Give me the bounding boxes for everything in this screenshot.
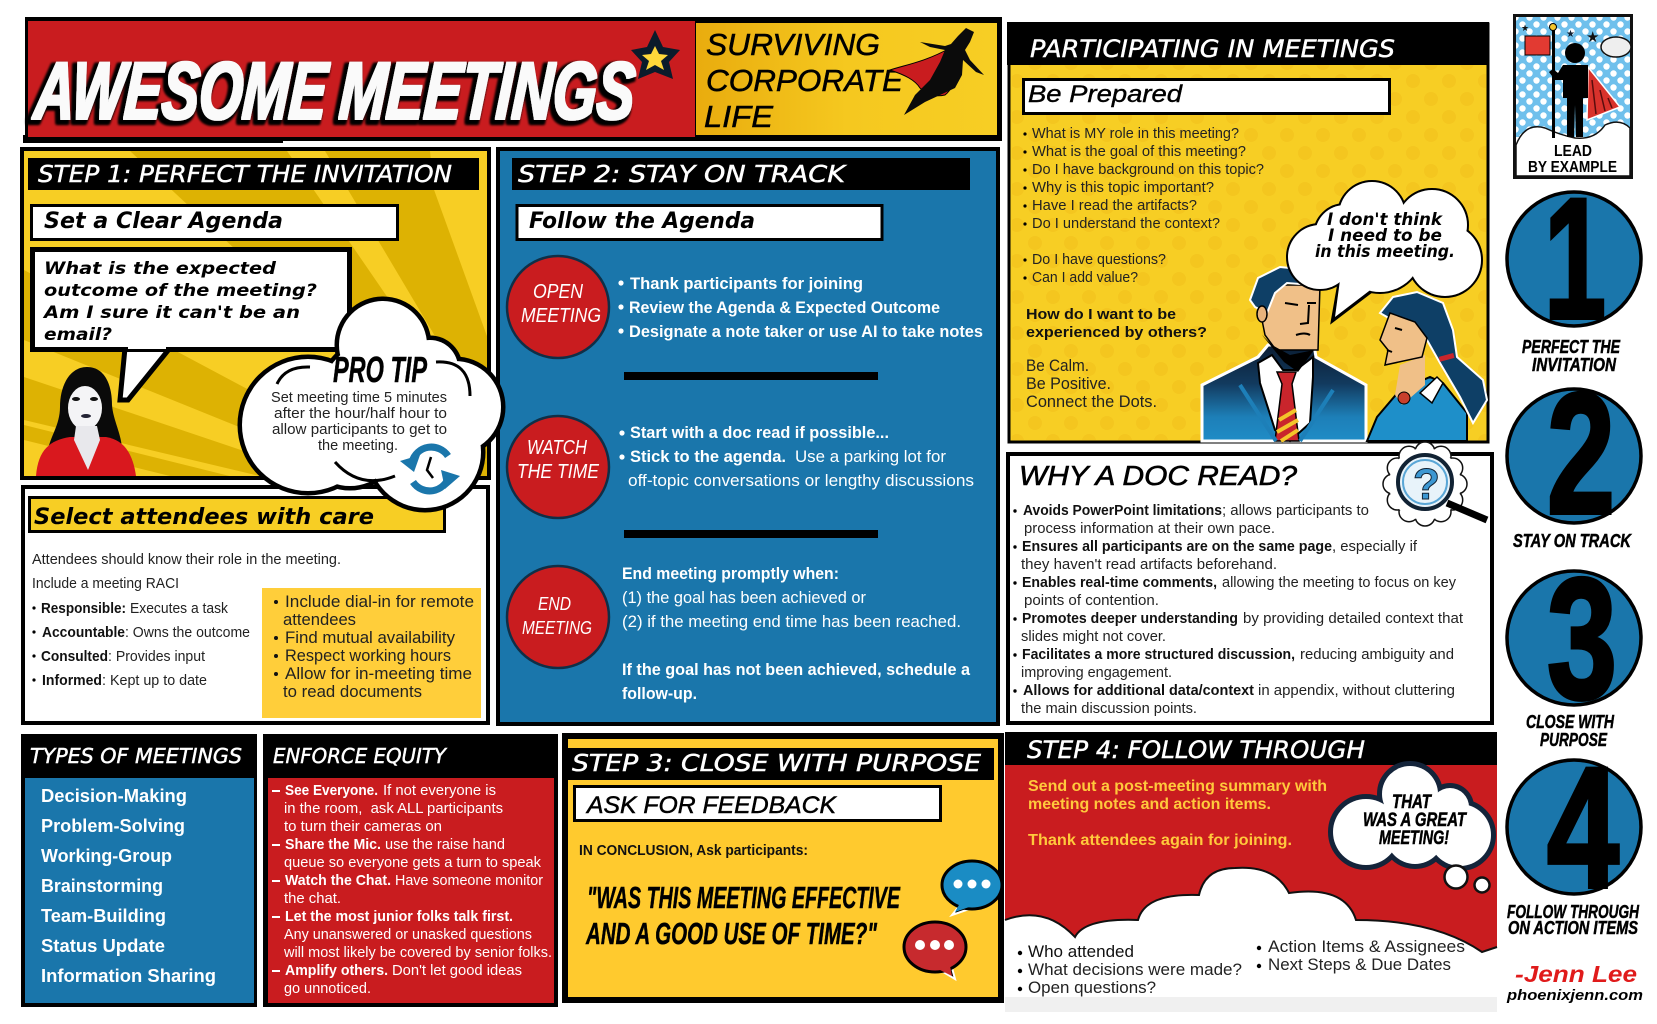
callout: logistics: to read documents — [283, 683, 422, 701]
text: doc read reasons: Promotes deeper understanding — [1022, 610, 1238, 627]
icon: superhero silhouette — [890, 28, 984, 115]
text: RACI: : Kept up to date — [102, 672, 207, 689]
text: doc read reasons: Avoids PowerPoint limitations — [1023, 502, 1222, 519]
text: equity rules: Watch the Chat. — [285, 872, 391, 889]
text: experience: How do I want to be — [1026, 306, 1176, 323]
icon: clock arrows — [400, 447, 460, 491]
card: lead by example: BY EXAMPLE — [1528, 159, 1617, 176]
list: preparation questions: Have I read the artifacts? — [1032, 197, 1197, 214]
text: equity rules: Share the Mic. — [285, 836, 381, 853]
heading: equity: ENFORCE EQUITY — [273, 744, 448, 768]
panel: step 2 — [498, 149, 998, 724]
text: equity rules: If not everyone is — [383, 782, 496, 799]
icon: magnifier question: ? — [1413, 460, 1440, 509]
white cloud with lists: Action Items & Assignees — [1268, 938, 1465, 956]
subtitle panel: CORPORATE — [706, 63, 903, 98]
watch the time: Stick to the agenda. — [630, 448, 786, 466]
panel: select attendees — [23, 487, 488, 723]
text: summary — [1028, 778, 1327, 849]
icon: red chat bubble — [904, 922, 966, 979]
white cloud with lists: Next Steps & Due Dates — [1268, 956, 1451, 974]
step badge 3: PURPOSE — [1540, 730, 1608, 750]
text: experience: Be Calm. — [1026, 357, 1089, 375]
end meeting: If the goal has not been achieved, schedule a — [622, 661, 971, 679]
heading: doc read: WHY A DOC READ? — [1019, 460, 1297, 491]
icon: man — [1202, 267, 1366, 441]
list: meeting types — [41, 785, 216, 986]
callout: pro tip cloud: PRO TIP — [333, 349, 428, 390]
subheading: be prepared: Be Prepared — [1028, 81, 1183, 108]
callout: pro tip cloud: allow participants to get to — [272, 422, 447, 438]
subtitle panel — [696, 23, 997, 135]
panel: why a doc read — [1008, 442, 1492, 723]
text: RACI: Responsible: — [41, 600, 126, 617]
heading: types: TYPES OF MEETINGS — [30, 744, 242, 768]
icon: leader figure — [1521, 23, 1620, 138]
open meeting — [507, 256, 983, 358]
text: RACI: : Owns the outcome — [125, 624, 250, 641]
subheading: be prepared — [1024, 80, 1390, 114]
subheading: attendees — [30, 498, 444, 532]
text: equity rules: to turn their cameras on — [284, 818, 442, 835]
subheading: feedback: ASK FOR FEEDBACK — [585, 792, 837, 819]
speech bubble: question: What is the expected — [44, 259, 277, 279]
panel: types of meetings — [21, 734, 257, 1007]
quote: AND A GOOD USE OF TIME?" — [585, 916, 878, 951]
text: equity rules: the chat. — [284, 890, 341, 907]
text: experience — [1026, 306, 1207, 411]
callout: logistics: attendees — [283, 611, 356, 629]
open meeting: MEETING — [521, 305, 601, 327]
text: equity rules: in the room, ask ALL participants — [284, 800, 503, 817]
icon: blue chat bubble — [942, 861, 1002, 915]
end meeting: MEETING — [522, 618, 592, 638]
list: preparation questions: Can I add value? — [1032, 269, 1138, 286]
text: RACI: Attendees should know their role in the meeting. — [32, 552, 341, 568]
list: meeting types: Brainstorming — [41, 875, 163, 896]
text: doc read reasons: process information at their own pace. — [1024, 520, 1275, 537]
text: RACI: Informed — [42, 672, 102, 689]
text: doc read reasons: reducing ambiguity and — [1300, 646, 1454, 663]
text: doc read reasons: allowing the meeting to focus on key — [1222, 574, 1456, 591]
icon: leader figure: ★ — [1586, 29, 1599, 46]
callout: pro tip cloud — [242, 301, 501, 508]
heading: step 3: STEP 3: CLOSE WITH PURPOSE — [572, 751, 982, 777]
speech bubble: not needed: I need to be — [1328, 226, 1442, 246]
text: doc read reasons: Ensures all participants are on the same page — [1022, 538, 1332, 555]
step badge 4 — [1507, 732, 1641, 938]
speech bubble: question: outcome of the meeting? — [44, 281, 317, 301]
callout: pro tip cloud: Set meeting time 5 minutes — [271, 390, 447, 406]
text: equity rules: Don't let good ideas — [392, 962, 522, 979]
watch the time: WATCH — [527, 437, 587, 459]
step badge 3: CLOSE WITH — [1526, 712, 1615, 732]
text: doc read reasons: improving engagement. — [1021, 664, 1172, 681]
step badge 1: 1 — [1544, 163, 1606, 355]
end meeting: (2) if the meeting end time has been reached. — [622, 613, 961, 631]
speech bubble: question — [32, 250, 350, 400]
text: doc read reasons: Facilitates a more structured discussion, — [1022, 646, 1295, 663]
text: RACI: : Provides input — [108, 648, 206, 665]
heading: step 3 — [566, 748, 994, 780]
text: RACI — [32, 552, 341, 689]
white cloud with lists: What decisions were made? — [1028, 961, 1242, 979]
list: meeting types: Status Update — [41, 935, 165, 956]
panel: participating in meetings — [1007, 22, 1489, 442]
list: meeting types: Working-Group — [41, 845, 172, 866]
text: RACI: Consulted — [41, 648, 108, 665]
speech bubble: question: email? — [44, 325, 112, 345]
step badge 2: 2 — [1547, 358, 1615, 550]
panel: step 4 — [1005, 732, 1497, 1012]
text: equity rules — [272, 782, 552, 997]
list: preparation questions: What is MY role in this meeting? — [1032, 125, 1239, 142]
icon: woman — [36, 367, 136, 476]
list: preparation questions: Do I have background on this topic? — [1032, 161, 1264, 178]
text: summary: Send out a post-meeting summary with — [1028, 778, 1327, 795]
subtitle panel: LIFE — [704, 99, 773, 134]
text: RACI: Include a meeting RACI — [32, 575, 179, 592]
quote: "WAS THIS MEETING EFFECTIVE — [587, 880, 901, 915]
text: summary: Thank attendees again for joining. — [1028, 832, 1292, 849]
watch the time: off-topic conversations or lengthy discussions — [628, 472, 974, 490]
heading: step 1 — [28, 158, 479, 190]
text: RACI: Accountable — [42, 624, 125, 641]
text: equity rules: Any unanswered or unasked questions — [284, 926, 532, 943]
step badge 3: 3 — [1547, 543, 1617, 735]
title: AWESOME — [30, 46, 332, 137]
step badge 1: PERFECT THE — [1522, 337, 1621, 357]
text: RACI: Executes a task — [130, 600, 228, 617]
text: doc read reasons: they haven't read artifacts beforehand. — [1021, 556, 1277, 573]
watch the time: Use a parking lot for — [795, 448, 947, 466]
subheading: attendees: Select attendees with care — [34, 505, 374, 530]
subheading: feedback — [574, 786, 940, 820]
text: doc read reasons: ; allows participants to — [1222, 502, 1369, 519]
author signature — [1506, 961, 1643, 1004]
text: equity rules: Amplify others. — [285, 962, 388, 979]
panel: step 1 — [20, 147, 491, 480]
text: equity rules: Let the most junior folks talk first. — [285, 908, 513, 925]
icon: magnifier question — [1383, 442, 1487, 526]
card: lead by example: LEAD — [1554, 143, 1592, 160]
callout: pro tip cloud: the meeting. — [318, 438, 398, 454]
list: meeting types: Information Sharing — [41, 965, 216, 986]
text: equity rules: queue so everyone gets a turn to speak — [284, 854, 541, 871]
list: meeting types: Team-Building — [41, 905, 166, 926]
step badge 1: INVITATION — [1532, 355, 1617, 375]
thought cloud: WAS A GREAT — [1363, 810, 1467, 831]
step badge 2: STAY ON TRACK — [1513, 531, 1633, 551]
list: meeting types: Problem-Solving — [41, 815, 185, 836]
list: preparation questions: Why is this topic important? — [1032, 179, 1214, 196]
text: doc read reasons: by providing detailed context that — [1243, 610, 1464, 627]
icon: woman — [1367, 292, 1487, 441]
icon: star — [631, 30, 680, 79]
step badge 4: 4 — [1547, 732, 1619, 924]
list: preparation questions: Do I have questions? — [1032, 251, 1166, 268]
subheading: follow agenda: Follow the Agenda — [529, 209, 755, 234]
white cloud with lists — [1005, 868, 1497, 997]
text: doc read reasons: slides might not cover. — [1021, 628, 1166, 645]
thought cloud — [1333, 766, 1491, 892]
end meeting: End meeting promptly when: — [622, 565, 839, 583]
callout: logistics: Include dial-in for remote — [285, 593, 474, 611]
icon: leader figure: ★ — [1566, 29, 1575, 40]
white cloud with lists: Who attended — [1028, 943, 1134, 961]
text: experience: experienced by others? — [1026, 324, 1207, 341]
text: equity rules: use the raise hand — [385, 836, 505, 853]
text: equity rules: Have someone monitor — [395, 872, 543, 889]
heading: step 2 — [512, 158, 970, 190]
callout: pro tip cloud: after the hour/half hour to — [274, 406, 447, 422]
white cloud with lists: Open questions? — [1028, 979, 1156, 997]
text: equity rules: will most likely be covered by senior folks. — [283, 944, 552, 961]
text: doc read reasons: the main discussion points. — [1021, 700, 1197, 717]
author signature: -Jenn Lee — [1515, 961, 1637, 987]
watch the time — [507, 416, 974, 518]
text: doc read reasons: in appendix, without cluttering — [1258, 682, 1455, 699]
end meeting: (1) the goal has been achieved or — [622, 589, 866, 607]
heading: participating: PARTICIPATING IN MEETINGS — [1030, 35, 1395, 63]
thought cloud: MEETING! — [1379, 828, 1449, 849]
list: preparation questions: Do I understand the context? — [1032, 215, 1220, 232]
speech bubble: question: Am I sure it can't be an — [42, 303, 300, 323]
watch the time: Start with a doc read if possible... — [630, 424, 889, 442]
callout: logistics: Allow for in-meeting time — [285, 665, 472, 683]
subheading: agenda — [32, 206, 398, 240]
open meeting: Thank participants for joining — [630, 275, 863, 293]
open meeting: Review the Agenda & Expected Outcome — [629, 299, 940, 317]
step badge 2 — [1507, 358, 1641, 551]
callout: logistics: Respect working hours — [285, 647, 451, 665]
card: lead by example — [1514, 16, 1632, 178]
speech bubble: not needed: in this meeting. — [1315, 242, 1455, 262]
end meeting — [507, 565, 971, 703]
watch the time: THE TIME — [517, 461, 600, 483]
end meeting: END — [538, 594, 571, 614]
text: experience: Connect the Dots. — [1026, 393, 1157, 411]
text: equity rules: See Everyone. — [285, 782, 378, 799]
text: doc read reasons: , especially if — [1332, 538, 1418, 555]
text: conclusion: IN CONCLUSION, Ask participants: — [579, 843, 808, 859]
list: preparation questions — [1023, 125, 1264, 286]
subheading: follow agenda — [517, 206, 882, 240]
open meeting: Designate a note taker or use AI to take notes — [629, 323, 983, 341]
open meeting: OPEN — [533, 281, 583, 303]
heading: step 4: STEP 4: FOLLOW THROUGH — [1027, 736, 1365, 764]
title: MEETINGS — [337, 46, 638, 137]
callout: logistics — [262, 588, 481, 718]
quote — [585, 880, 901, 951]
author signature: phoenixjenn.com — [1506, 987, 1643, 1004]
end meeting: follow-up. — [622, 685, 697, 703]
step badge 3 — [1507, 543, 1641, 750]
speech bubble: not needed — [1288, 182, 1481, 320]
list: meeting types: Decision-Making — [41, 785, 187, 806]
header banner — [23, 17, 1002, 143]
subtitle panel: SURVIVING — [706, 27, 880, 62]
step badge 1 — [1507, 163, 1641, 375]
text: doc read reasons: Enables real-time comments, — [1022, 574, 1217, 591]
text: experience: Be Positive. — [1026, 375, 1111, 393]
heading: step 1: STEP 1: PERFECT THE INVITATION — [38, 162, 452, 188]
text: doc read reasons: points of contention. — [1024, 592, 1159, 609]
speech bubble: not needed: I don't think — [1327, 210, 1444, 230]
subheading: agenda: Set a Clear Agenda — [44, 209, 283, 234]
text: equity rules: go unnoticed. — [284, 980, 371, 997]
text: doc read reasons: Allows for additional data/context — [1023, 682, 1254, 699]
icon: leader figure: ★ — [1521, 23, 1529, 33]
text: doc read reasons — [1013, 502, 1464, 717]
callout: logistics: Find mutual availability — [285, 629, 456, 647]
panel: enforce equity — [263, 734, 558, 1007]
text: summary: meeting notes and action items. — [1028, 796, 1271, 813]
heading: step 2: STEP 2: STAY ON TRACK — [518, 162, 847, 188]
list: preparation questions: What is the goal of this meeting? — [1032, 143, 1246, 160]
thought cloud: THAT — [1392, 792, 1432, 813]
panel: step 3 — [565, 736, 1002, 1000]
